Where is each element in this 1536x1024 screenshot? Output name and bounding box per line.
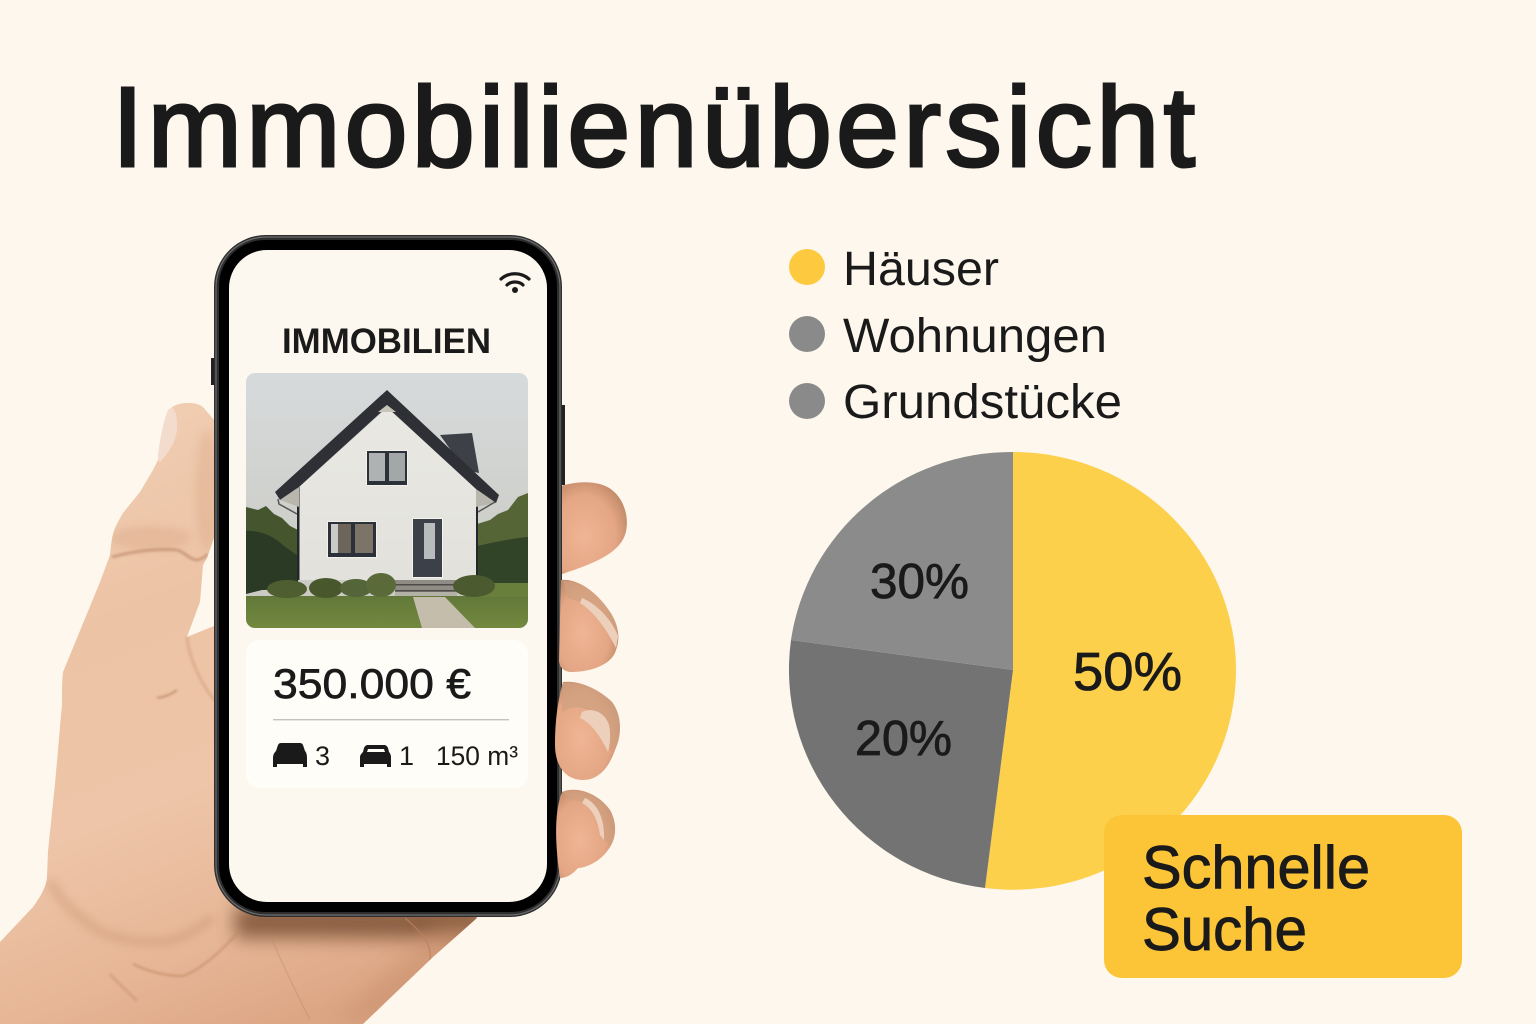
house photo bbox=[246, 373, 528, 628]
finger 1 bbox=[556, 482, 627, 576]
app heading: IMMOBILIEN bbox=[282, 322, 491, 361]
slice: 20% Wohnungen bbox=[789, 640, 1013, 888]
finger 4 bbox=[556, 790, 615, 878]
slice: 30% Grundstücke bbox=[791, 452, 1013, 670]
house wall bbox=[299, 408, 476, 580]
bushes bbox=[267, 573, 495, 598]
legend item: Grundstücke: Grundstücke bbox=[843, 376, 1122, 429]
legend item: Wohnungen: Wohnungen bbox=[843, 310, 1107, 363]
lawn bbox=[246, 596, 528, 628]
finger 3 bbox=[555, 682, 620, 780]
gutters bbox=[278, 499, 297, 514]
door bbox=[412, 518, 443, 578]
price: 350.000 € bbox=[273, 660, 471, 707]
slice: 50% Häuser bbox=[985, 452, 1236, 890]
trees and hedges bbox=[246, 493, 528, 594]
icon: wifi bbox=[501, 274, 529, 293]
phone screen bbox=[229, 250, 547, 902]
bathrooms count: 1 bbox=[399, 741, 414, 771]
side roof bbox=[440, 433, 479, 473]
side buttons bbox=[211, 358, 565, 485]
garden path bbox=[413, 597, 475, 628]
upper window bbox=[366, 450, 408, 486]
title: Immobilienübersicht bbox=[112, 64, 1195, 190]
label: 30%: 30% bbox=[870, 555, 969, 609]
pie chart bbox=[789, 452, 1236, 890]
legend item: Häuser: Häuser bbox=[843, 243, 999, 296]
divider bbox=[273, 719, 509, 720]
thumb nail bbox=[158, 408, 177, 462]
finger 2 bbox=[559, 580, 618, 672]
legend bbox=[789, 243, 1122, 429]
callout: Schnelle Suche: Suche bbox=[1142, 896, 1307, 963]
lower window bbox=[327, 521, 377, 558]
callout: Schnelle Suche: Schnelle bbox=[1142, 834, 1370, 901]
callout: Schnelle Suche bbox=[1104, 815, 1462, 978]
roof bbox=[275, 390, 499, 503]
icon: bed 1 bbox=[273, 743, 307, 767]
bedrooms count: 3 bbox=[315, 741, 330, 771]
living area: 150 m³ bbox=[436, 741, 518, 771]
hand: palm and thumb bbox=[0, 403, 490, 1024]
phone bbox=[211, 235, 565, 917]
label: 20%: 20% bbox=[855, 712, 952, 766]
property card bbox=[246, 640, 528, 788]
icon: bed 2 bbox=[360, 745, 391, 767]
phone body bbox=[214, 235, 562, 917]
label: 50%: 50% bbox=[1073, 642, 1182, 702]
steps bbox=[395, 580, 457, 596]
